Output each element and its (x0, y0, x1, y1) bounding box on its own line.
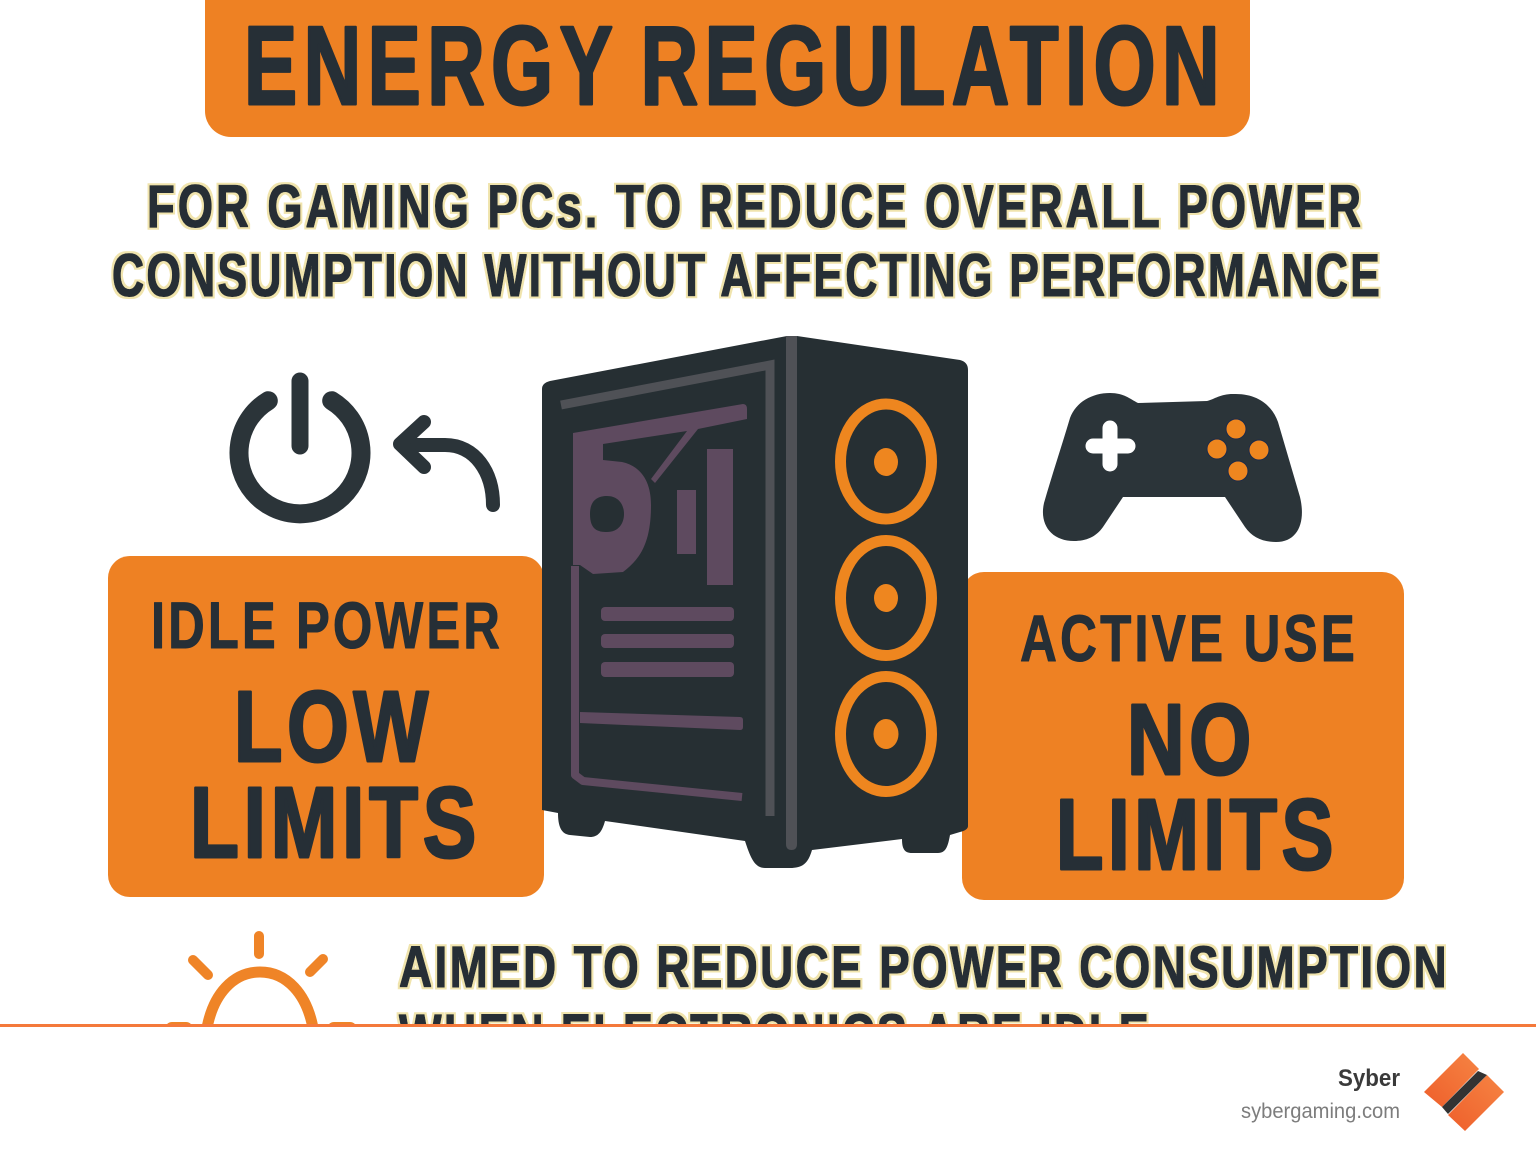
low limits value: LOW (234, 671, 433, 783)
arrow: return to idle (400, 422, 493, 505)
icon: power button (239, 381, 361, 514)
low limits value: LIMITS (190, 767, 481, 879)
idle label: IDLE POWER (151, 588, 503, 662)
icon: brand logo (1424, 1053, 1504, 1131)
icon: game controller (1043, 393, 1302, 542)
title banner (205, 0, 1250, 137)
description text: WHEN ELECTRONICS ARE IDLE (399, 1003, 1151, 1068)
footer bar (0, 1024, 1536, 1154)
brand url: sybergaming.com (1241, 1100, 1400, 1123)
description text (396, 944, 1446, 1024)
panel: active use (962, 572, 1404, 900)
icon: gaming PC tower (542, 336, 968, 868)
no limits value (1056, 684, 1338, 891)
no limits value: NO (1127, 684, 1256, 796)
active label: ACTIVE USE (1020, 601, 1358, 675)
icon: sun (172, 936, 350, 1034)
motherboard and components (573, 404, 747, 730)
brand name: Syber (1338, 1065, 1400, 1092)
subtitle (112, 173, 1382, 309)
no limits value: LIMITS (1056, 779, 1338, 891)
case body (542, 336, 968, 868)
corner post (786, 336, 797, 850)
glass frame (561, 365, 770, 816)
low limits value (190, 671, 481, 879)
panel: idle power (108, 556, 544, 897)
fans (840, 404, 932, 792)
